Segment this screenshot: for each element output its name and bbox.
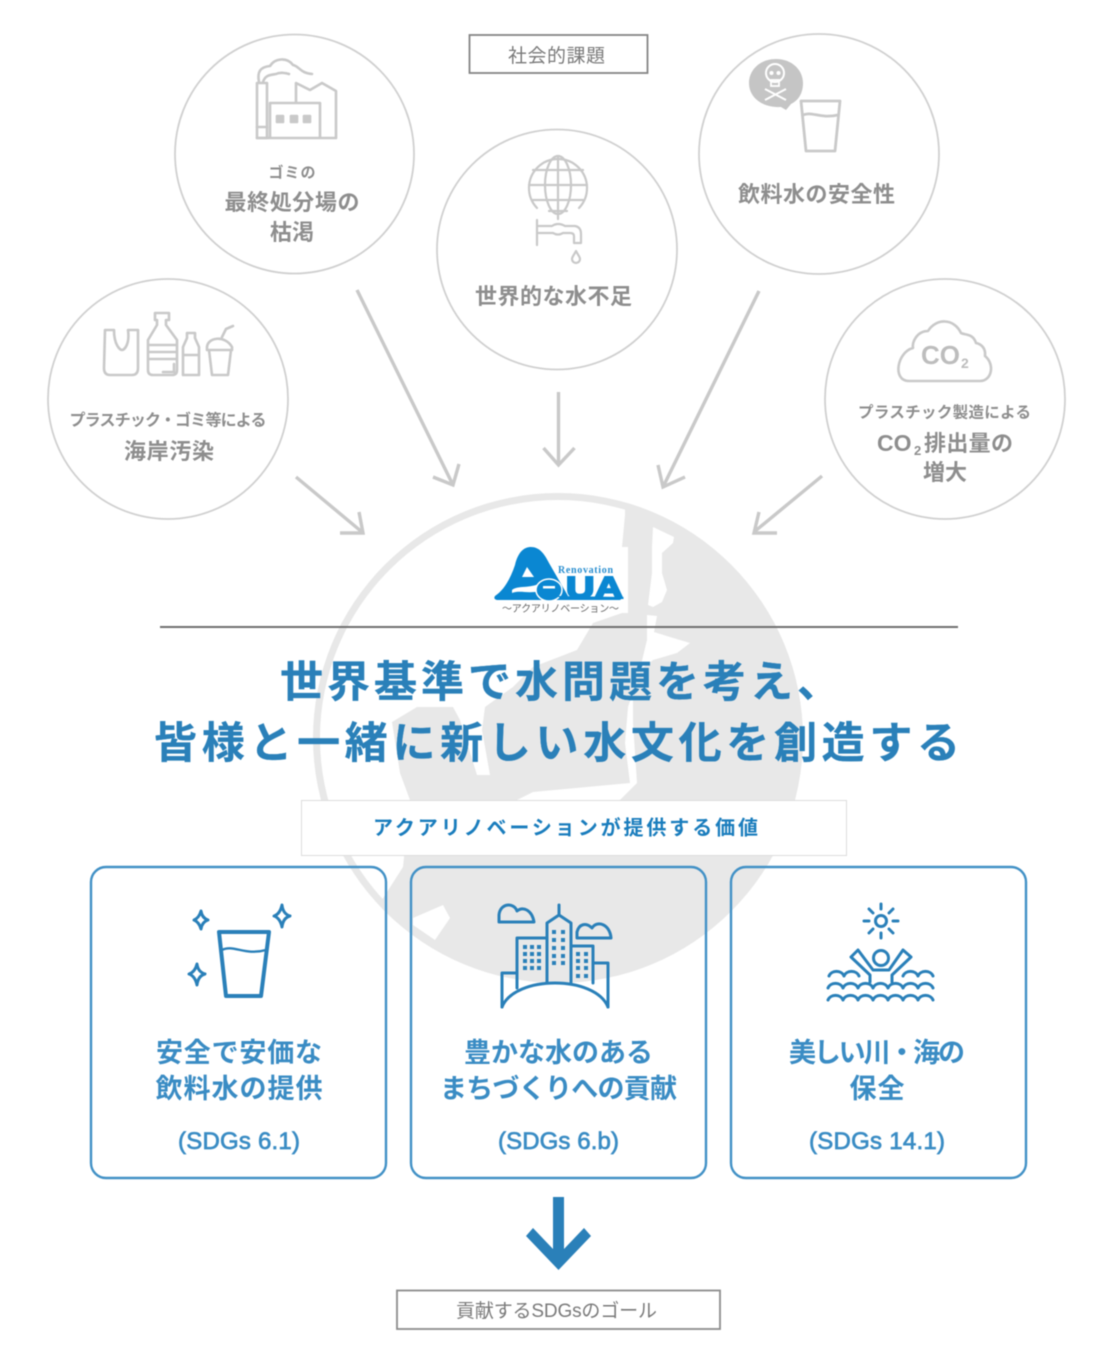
- text: water-rich communities: 豊かな水のある: [464, 1038, 653, 1068]
- panel: global water shortage: [437, 130, 677, 370]
- logo: Aqua Renovation: 〜アクアリノベーション〜: [502, 603, 619, 615]
- text: safe drinking water: 安全で安価な: [156, 1038, 322, 1068]
- icon: CO2 cloud: 2: [961, 355, 969, 371]
- text: CO2 emissions: プラスチック製造による: [858, 404, 1031, 422]
- text: landfill: [224, 164, 360, 245]
- heading label: social issues: 社会的課題: [508, 45, 605, 67]
- text: river and sea conservation: 保全: [850, 1074, 904, 1104]
- panel: CO2 emissions: [825, 279, 1065, 519]
- divider rule: [160, 626, 958, 628]
- card: safe drinking water: [91, 867, 386, 1178]
- logo: Aqua Renovation: UA: [566, 570, 623, 605]
- arrow: landfill to centre: [357, 290, 459, 485]
- text: coastal pollution: プラスチック・ゴミ等による: [70, 410, 266, 430]
- logo: Aqua Renovation: Renovation: [558, 565, 613, 576]
- text: CO2 emissions: CO: [877, 430, 912, 456]
- text: water-rich communities: まちづくりへの貢献: [440, 1074, 677, 1104]
- text: landfill: ゴミの: [268, 164, 316, 182]
- text: SDGs 6.1: (SDGs 6.1): [178, 1128, 300, 1155]
- text: CO2 emissions: [858, 404, 1031, 485]
- logo: Aqua Renovation: [492, 547, 628, 615]
- icon: globe and faucet: [529, 156, 587, 263]
- headline: 皆様と一緒に新しい水文化を創造する: [154, 720, 960, 768]
- text: landfill: 枯渇: [270, 220, 314, 245]
- icon: plastic waste: [104, 313, 233, 375]
- icon: CO2 cloud: [898, 321, 991, 381]
- headline: 世界基準で水問題を考え、: [280, 659, 840, 707]
- background globe map: [290, 490, 803, 983]
- footer label: contributing SDG goals: 貢献するSDGsのゴール: [456, 1300, 657, 1322]
- text: SDGs 6.b: (SDGs 6.b): [498, 1128, 619, 1155]
- arrow: CO2 to centre: [754, 476, 822, 533]
- icon: swimmer under sun: [828, 904, 933, 1000]
- icon: skull speech bubble: [749, 59, 803, 110]
- icon: glass of water: [801, 101, 840, 151]
- text: drinking water: 飲料水の安全性: [738, 182, 895, 207]
- text: water-rich communities: [440, 1038, 677, 1104]
- value banner: アクアリノベーションが提供する価値: [373, 816, 758, 840]
- text: coastal pollution: [70, 410, 266, 464]
- icon: sparkling glass: [189, 905, 290, 996]
- text: landfill: 最終処分場の: [224, 190, 360, 215]
- text: SDGs 14.1: (SDGs 14.1): [809, 1128, 945, 1155]
- text: CO2 emissions: 排出量の: [924, 431, 1013, 456]
- icon: factory: [257, 59, 336, 138]
- value banner: [302, 800, 846, 856]
- text: safe drinking water: [156, 1038, 322, 1104]
- text: water shortage: 世界的な水不足: [475, 284, 632, 309]
- arrow: water shortage to centre: [544, 392, 574, 465]
- arrow: coastal pollution to centre: [296, 477, 363, 533]
- panel: drinking water safety: [699, 34, 939, 274]
- text: coastal pollution: 海岸汚染: [124, 439, 214, 464]
- headline: [154, 659, 960, 768]
- panel: landfill depletion: [175, 34, 414, 274]
- text: CO2 emissions: 2: [914, 443, 921, 458]
- text: safe drinking water: 飲料水の提供: [156, 1074, 322, 1104]
- footer label: contributing SDG goals: [397, 1290, 720, 1329]
- text: river and sea conservation: [789, 1038, 965, 1104]
- icon: CO2 cloud: CO: [921, 340, 960, 370]
- card: river and sea conservation: [731, 867, 1026, 1178]
- arrow: drinking water to centre: [658, 291, 759, 487]
- text: river and sea conservation: 美しい川・海の: [789, 1038, 965, 1068]
- icon: city: [499, 905, 611, 1007]
- card: water-rich communities: [411, 867, 706, 1178]
- panel: coastal pollution: [48, 279, 288, 519]
- arrow: down to goals: [526, 1197, 591, 1270]
- heading label: social issues: [470, 35, 648, 73]
- text: CO2 emissions: 増大: [923, 460, 967, 485]
